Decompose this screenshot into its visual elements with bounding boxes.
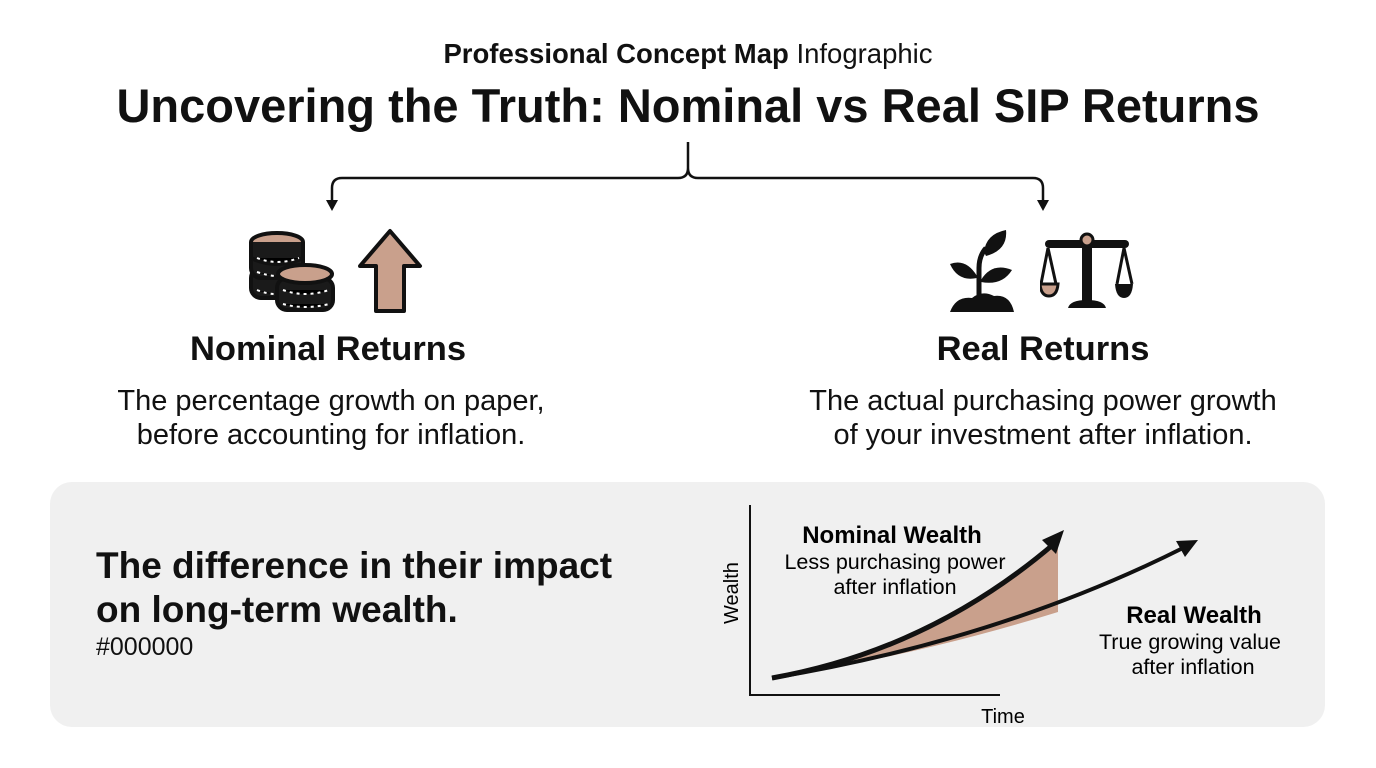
chart: nominal vs real wealth (721, 505, 1281, 728)
text: impact statement: on long-term wealth. (96, 589, 458, 630)
chart: nominal vs real wealth: Real Wealth (1126, 602, 1262, 629)
text: impact statement: The difference in their impact (96, 545, 612, 586)
text: nominal description: The percentage growth on paper, (117, 385, 545, 417)
text: impact statement (96, 545, 612, 661)
heading: real returns: Real Returns (937, 330, 1149, 368)
heading: nominal returns: Nominal Returns (190, 330, 466, 368)
chart: nominal vs real wealth: after inflation (1131, 655, 1255, 679)
branching connector arrows (326, 142, 1049, 211)
icon: coins (249, 231, 335, 312)
icon: up arrow (358, 228, 422, 313)
icon: plant (950, 230, 1014, 312)
subtitle: Professional Concept Map Infographic (443, 38, 933, 69)
icon: balance scale (1040, 232, 1134, 308)
title: Uncovering the Truth: Nominal vs Real SIP Returns (116, 79, 1260, 132)
text: nominal description: before accounting for inflation. (137, 419, 525, 451)
text: nominal description (117, 385, 545, 451)
text: real description: of your investment after inflation. (833, 419, 1253, 451)
chart: nominal vs real wealth: Wealth (721, 562, 743, 624)
chart: nominal vs real wealth: True growing value (1099, 630, 1281, 654)
chart: nominal vs real wealth: after inflation (833, 575, 957, 599)
text: real description (809, 385, 1277, 451)
panel: impact on wealth (50, 482, 1325, 727)
chart: nominal vs real wealth: Less purchasing power (784, 550, 1006, 574)
text: impact statement: #000000 (96, 633, 193, 661)
text: real description: The actual purchasing power growth (809, 385, 1277, 417)
chart: nominal vs real wealth: Time (981, 706, 1025, 728)
chart: nominal vs real wealth: Nominal Wealth (802, 522, 982, 549)
